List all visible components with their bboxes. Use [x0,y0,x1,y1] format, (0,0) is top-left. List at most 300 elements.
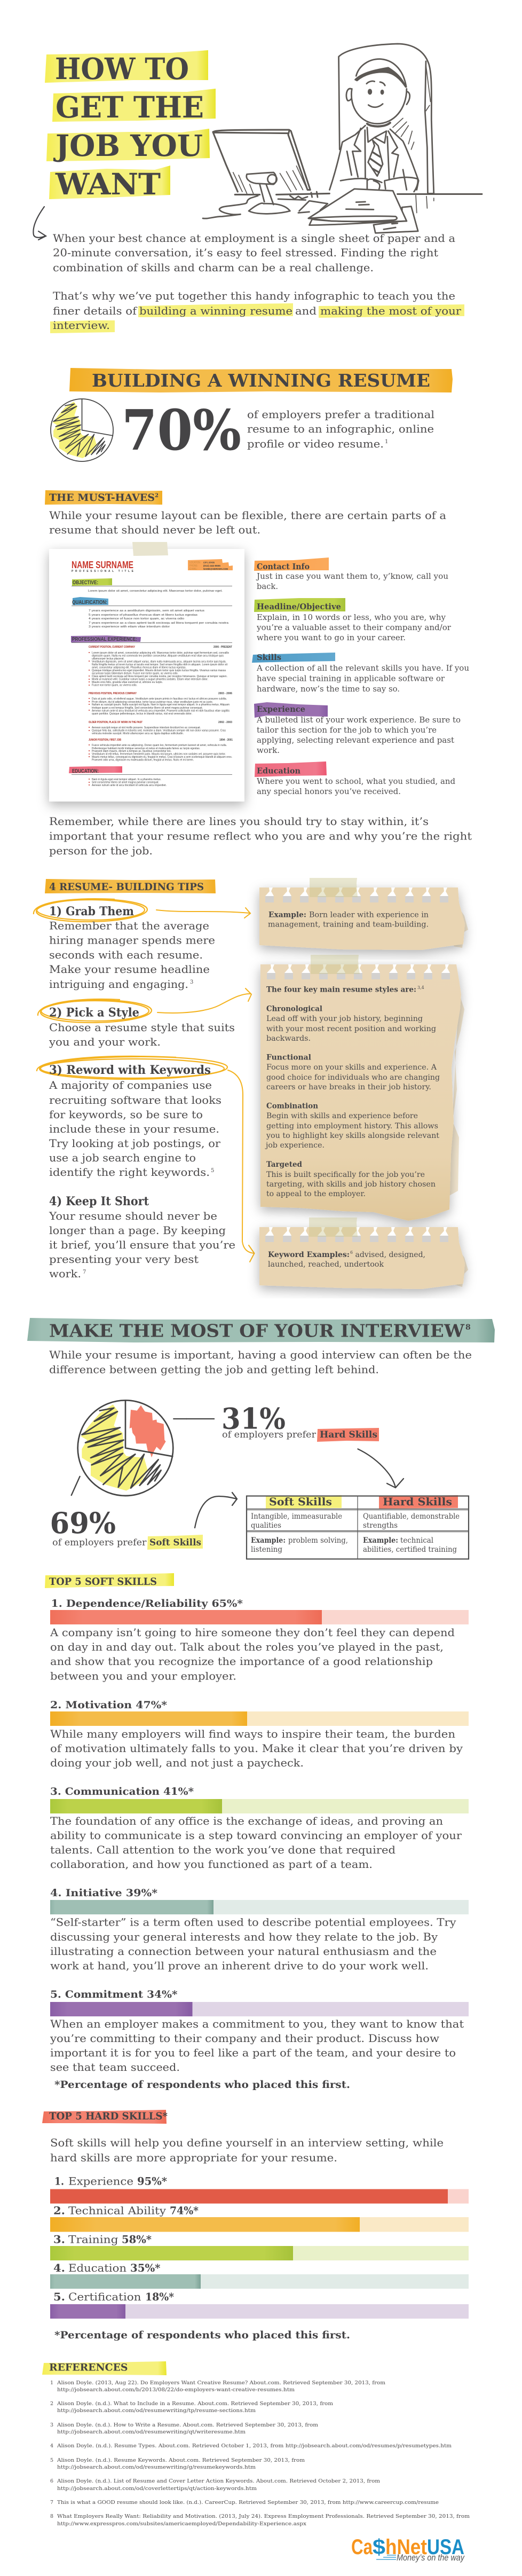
tip 4: keep it short: Your resume should never be [49,1210,217,1222]
section heading: make the most of your interview: MAKE THE MOST OF YOUR INTERVIEW [49,1320,465,1341]
table: soft skills vs hard skills: Intangible, immeasurable [251,1512,342,1521]
resume part: experience: tailor this section for the job to which you’re [257,725,437,735]
soft skill 2: motivation: While many employers will find ways to inspire their team, the burden [50,1727,455,1740]
soft skill 5: commitment [50,1989,469,2074]
must-haves intro text: resume that should never be left out. [49,523,260,536]
sub heading: references: REFERENCES [49,2362,128,2373]
resume education: EDUCATION: [72,768,99,774]
sub heading: top 5 hard skills: TOP 5 HARD SKILLS* [49,2111,168,2122]
tip 3: reword with keywords: use a job search engine to [49,1151,196,1164]
references list: Alison Doyle. (n.d.). What to Include in a Resume. About.com. Retrieved September 30, 2013, from [57,2401,333,2407]
tape [309,1218,358,1237]
bar: 18 percent [50,2304,469,2319]
resume objective: OBJECTIVE: [73,580,98,586]
references list: Alison Doyle. (2013, Aug 22). Do Employers Want Creative Resume? About.com. Retrieved September 30, 2013, from [57,2380,385,2386]
resume part: experience: applying, selecting relevant experience and past [257,735,454,745]
style: targeted: to appeal to the employer. [266,1190,366,1198]
style: chronological [266,1005,436,1043]
resume contact block: CITY, STATE [203,561,215,564]
resume professional experience: Lorem ipsum dolor sit amet, consectetur adipiscing elit. Maecenas tortor dolor, pulvinar eget fermentum sed, convallis [92,651,229,655]
sub heading: top 5 soft skills [45,1573,174,1588]
resume professional experience: ullamcorper lectus placerat. [92,657,124,661]
table: soft skills vs hard skills: abilities, certified training [363,1545,457,1554]
statistic: 69 percent soft skills: 69% [50,1506,116,1540]
table header highlights [266,1495,342,1509]
style: functional: good choice for individuals who are changing [266,1073,440,1082]
style: combination: job experience. [265,1141,325,1150]
resume part: skills [252,653,469,694]
tip 1: grab them [34,898,215,991]
hard skills wedge [130,1405,166,1457]
soft skill 5: commitment: important it is for you to feel like a part of the team, and your desire to [50,2046,456,2059]
resume professional experience: Proin dictum, dui id adipiscing consectetur, tortor lacus pulvinar risus, vitae vestibulum justo mi ac justo. [92,701,213,704]
resume professional experience: PROFESSIONAL EXPERIENCE: [72,637,137,642]
table: soft skills vs hard skills: qualities [251,1521,281,1530]
resume contact block: E-MAIL: [189,568,197,571]
table: soft skills vs hard skills: problem solving, [288,1536,348,1545]
table: soft skills vs hard skills: strengths [363,1521,398,1530]
soft skill 5: commitment: When an employer makes a commitment to you, they want to know that [50,2017,464,2030]
bar: 35 percent [50,2274,469,2289]
tip 4: keep it short: longer than a page. By keeping [49,1224,226,1237]
statistic: 70 percent of employers: of employers prefer a traditional [247,408,434,421]
intro text: When your best chance at employment is a single sheet of paper and a [53,232,455,245]
tip 3: reword with keywords: identify the right keywords. [49,1166,210,1179]
tape [311,955,360,974]
tip 2: pick a style: 2) Pick a Style [49,1006,139,1020]
table: soft skills vs hard skills: listening [251,1545,282,1554]
note: keyword examples: 6 [350,1250,353,1255]
references list: Alison Doyle. (n.d.). List of Resume and Cover Letter Action Keywords. About.com. Retrieved October 2, 2013, from [57,2478,380,2484]
hard skill 4: education [50,2261,469,2289]
resume part: education [255,761,455,796]
bar: 74 percent [50,2217,469,2232]
bar: 39 percent [50,1900,469,1914]
bar: 95 percent [50,2189,469,2203]
resume part: contact info: back. [257,582,278,591]
note: four resume styles [260,955,464,1221]
circled heading [34,898,147,923]
hard skill 4: education: 4. [53,2261,65,2274]
must-haves intro text [49,509,446,536]
intro text: making the most of your [320,304,461,317]
hard skill 2: technical ability: Technical Ability [68,2204,167,2217]
resume part: headline/objective: you’re a valuable asset to their company and/or [256,623,452,632]
tip 2: pick a style: you and your work. [49,1035,161,1048]
statistic: 70 percent of employers: resume to an infographic, online [247,422,434,435]
soft skill 3: communication: collaboration, and how you functioned as part of a team. [50,1858,373,1871]
style: functional [266,1053,440,1091]
resume professional experience: Pellentesque habitant morbi tristique senectus et netus et malesuada fames ac turpis egestas. [92,747,200,750]
resume professional experience: Fusce vehicula imperdiet ante eu adipiscing. Donec quam leo, fermentum pretium laoreet sit amet, vehicula in nulla. [92,744,227,747]
section heading: building a winning resume: BUILDING A WINNING RESUME [92,370,430,391]
resume professional experience: Mauris eros felis, gravida vitae euismod ut, ultricies eu turpis. [92,681,163,684]
tip 4: keep it short: 7 [83,1269,86,1275]
resume objective [72,578,232,593]
resume professional experience: Quisque tristique pharetra leo eget imperdiet. Mauris dictum tortor quis turpis luctus fringilla. Vivamus varius massa [92,669,226,672]
resume professional experience: dignissim quam. Nulla eu est commodo leo porttitor consectetur. Aliquam vestibulum erat vitae arcu tristique quis [92,655,224,658]
soft skill 4: initiative: illustrating a connection between your natural enthusiasm and the [50,1945,437,1958]
soft skill 2: motivation: 2. Motivation 47%* [50,1699,167,1711]
tip 3: reword with keywords: Try looking at job postings, or [49,1137,220,1150]
illustration: man at desk with computer [203,44,482,233]
intro text: finer details of [53,304,138,317]
resume part: skills: hardware, now’s the time to say so. [257,684,400,694]
soft skill 2: motivation [50,1699,469,1769]
resume part: education: any special honors you’ve received. [257,787,401,796]
title: how to get the job you want: WANT [55,167,161,201]
tip 3: reword with keywords: A majority of companies use [49,1079,212,1091]
arrow: tip 1 to example [156,908,250,918]
tip 3: reword with keywords: include these in your resume. [49,1122,219,1135]
references list: 3 [50,2422,53,2428]
interview intro text: difference between getting the job and getting left behind. [49,1363,379,1376]
references list: Alison Doyle. (n.d.). Resume Types. About.com. Retrieved October 1, 2013, from http://jobsearch.about.com/od/resumes/p/resumetypes.htm [57,2443,452,2449]
resume professional experience: Vestibulum id elit tellus, fermentum hendrerit justo. Mauris nisl ipsum, ultricies non sodales vel, posuere quis tortor. [92,753,226,756]
note: resume headline example: Born leader with experience in [309,911,429,920]
resume education: Sed consectetur libero sit amet magna pulvinar consequat. [92,781,159,784]
table: soft skills vs hard skills: Soft Skills [269,1495,332,1508]
soft skill 4: initiative: 4. Initiative 39%* [50,1887,157,1899]
resume qualification: 7 years experience as a aestibulum dignissim, sem sit amet aliquet varius [89,609,205,612]
soft skill 5: commitment: see that team succeed. [50,2061,180,2074]
statistic: 70 percent of employers: profile or video resume. [247,437,384,450]
statistic: 70 percent of employers [122,397,434,463]
resume name header: NAME SURNAME [72,560,133,570]
sub heading: top 5 soft skills: TOP 5 SOFT SKILLS [49,1576,157,1588]
title: how to get the job you want: JOB YOU [53,128,203,163]
sub heading: the must-haves [45,490,162,505]
closing resume text [49,815,472,857]
bar: 47 percent [50,1711,469,1726]
resume professional experience: 2003 - 2006 [218,692,232,695]
soft skill 3: communication: 3. Communication 41%* [50,1786,194,1797]
title: how to get the job you want [45,50,216,201]
resume part: headline/objective: Headline/Objective [257,602,341,611]
resume professional experience: accumsan turpis bibendum dictum. Fusce non tortor quam, ac viverra odio. [92,672,178,675]
tip 4: keep it short: work. [49,1267,81,1280]
resume professional experience: Mauris metus tellus, consequat eu dignissim eu, feugiat in metus. Cras id ipsum a sem scelerisque blandit at aliquam eros. [92,756,232,759]
references list: 7 [50,2500,53,2506]
style: chronological: Lead off with your job history, beginning [266,1015,423,1023]
resume part: skills: A collection of all the relevant skills you have. If you [256,663,469,673]
circled heading [38,999,152,1024]
pie chart: 70 percent [51,399,113,461]
hard skill 3: training: 58%* [122,2233,152,2246]
interview intro text: While your resume is important, having a good interview can often be the [49,1348,472,1361]
table: soft skills vs hard skills: Example: [363,1536,398,1545]
tip 1: grab them: Make your resume headline [49,963,210,976]
references list: http://www.expresspros.com/subsites/americaemployed/Dependability-Experience.aspx [57,2521,307,2527]
resume contact block: PHONE: [189,564,198,568]
tip 1: grab them: seconds with each resume. [49,948,203,961]
closing resume text: important that your resume reflect who you are and why you’re the right [49,830,472,843]
note: four resume styles: The four key main resume styles are: [266,986,416,994]
section heading: make the most of your interview: 8 [465,1323,471,1332]
hard skills intro text [50,2136,444,2164]
logo: CashNetUSA: hNet [385,2535,427,2559]
references list: What Employers Really Want: Reliability and Motivation. (2013, July 24). Express Employment Professionals. Retrieved September 30, 2013, from [57,2514,470,2519]
footnote: soft skills percentage: *Percentage of respondents who placed this first. [54,2079,350,2091]
statistic: 31 percent hard skills: 31% [222,1401,286,1435]
tip 3: reword with keywords: 5 [211,1168,214,1174]
soft skill 2: motivation: doing your job well, and not just a paycheck. [50,1756,304,1769]
soft skill 1: dependence/reliability: between you and your employer. [50,1669,236,1682]
resume part: contact info [254,557,448,591]
resume part: experience: Experience [257,704,305,714]
resume part: contact info: Just in case you want them to, y’know, call you [256,571,448,581]
resume qualification: QUALIFICATION: [72,600,107,606]
tip 1: grab them: Remember that the average [49,920,209,932]
statistic: 31 percent hard skills: of employers prefer [222,1430,317,1440]
hard skill 5: certification: 5. [53,2290,65,2303]
resume professional experience: 1994 - 2001 [219,739,233,742]
statistic: 69 percent soft skills [50,1506,203,1550]
table: soft skills vs hard skills: Quantifiable, demonstrable [363,1512,460,1521]
intro text: 20-minute conversation, it’s easy to feel stressed. Finding the right [53,246,438,259]
resume professional experience: Praesent odio urna, dignissim eu malesuada dictum, feugiat ut lectus. Nunc et mi lorem. [92,758,194,761]
resume professional experience: Duis at justo odio, et eleifend augue. Vestibulum ante ipsum primis in faucibus orci luctus et ultrices posuere cubilia. [92,697,227,701]
note: keyword examples: launched, reached, undertook [268,1260,384,1269]
tape on resume [132,542,168,556]
references list: http://jobsearch.about.com/od/coverlettertips/qt/action-keywords.htm [57,2486,257,2492]
resume part: headline/objective: Explain, in 10 words or less, who you are, why [257,612,446,622]
style: combination: you to highlight key skills alongside relevant [266,1132,439,1140]
soft skills wedge [78,1400,173,1496]
closing resume text: person for the job. [49,844,153,857]
note: resume headline example: management, training and team-building. [268,921,429,929]
tip 2: pick a style: Choose a resume style that suits [49,1021,235,1034]
logo: CashNetUSA: Money’s on the way [397,2553,465,2563]
intro text: That’s why we’ve put together this handy infographic to teach you the [53,289,455,302]
references list: http://jobsearch.about.com/b/2013/08/22/do-employers-want-creative-resumes.htm [57,2387,295,2393]
resume objective: Lorem ipsum dolor sit amet, consectetur adipiscing elit. Maecenas tortor dolor, pulvinar eget. [88,590,223,593]
tip 4: keep it short: 4) Keep It Short [49,1195,149,1208]
resume part: skills: Skills [257,653,281,662]
resume professional experience: Class aptent taciti sociosqu ad litora torquent per conubia nostra, per inceptos himenaeos. Quisque at tempor sapien. [92,675,227,678]
intro text: and [295,304,317,317]
note: keyword examples: advised, designed, [355,1251,425,1259]
soft skill 3: communication [50,1786,469,1871]
style: combination: Begin with skills and experience before [266,1112,418,1120]
hard skill 2: technical ability: 74%* [170,2204,199,2217]
resume name header: PROFESSIONAL TITLE [72,570,134,573]
bar: 65 percent [50,1610,469,1624]
hard skills intro text: Soft skills will help you define yourself in an interview setting, while [50,2136,444,2149]
resume qualification: 4 years experience of fusce non tortor quam, ac viverra odio [89,617,184,621]
resume qualification [72,597,232,629]
soft skill 1: dependence/reliability: on day in and day out. Talk about the roles you’ve played in the past, [50,1640,444,1653]
intro text: interview. [53,319,110,332]
style: chronological: with your most recent position and working [266,1025,436,1033]
resume professional experience: Aenean suscipit neque at nisl mollis posuere. Suspendisse interdum tincidunt leo ac consequat. [92,726,201,729]
statistic: 31 percent hard skills: Hard Skills [320,1430,377,1440]
statistic: 69 percent soft skills: Soft Skills [149,1537,201,1548]
style: combination: getting into employment history. This allows [266,1122,438,1130]
closing resume text: Remember, while there are lines you should try to stay within, it’s [49,815,429,828]
resume sample sheet [49,542,244,802]
resume professional experience [71,635,233,785]
soft skill 5: commitment: you’re committing to their company and their product. Discuss how [50,2032,439,2045]
resume part: headline/objective [254,598,452,642]
sub heading: the must-haves: 2 [155,493,159,499]
resume part: headline/objective: where you want to go in your career. [257,633,406,642]
tip 3: reword with keywords: recruiting software that looks [49,1094,222,1106]
resume part: skills: have special training in applicable software or [257,674,445,684]
table: soft skills vs hard skills: technical [400,1536,433,1545]
resume part: education: Where you went to school, what you studied, and [257,776,455,786]
references list: 8 [50,2514,53,2519]
hard skill 3: training: Training [68,2233,118,2246]
resume part: experience: work. [257,745,280,755]
hard skill 1: experience: Experience [68,2174,133,2187]
resume name header [72,560,134,573]
hard skill 1: experience: 1. [54,2174,64,2187]
note: keyword examples: Keyword Examples: [268,1251,350,1259]
soft skill 1: dependence/reliability: and show that you recognize the importance of a good relationship [50,1655,433,1668]
references list: This is what a GOOD resume should look like. (n.d.). CareerCup. Retrieved September 30, 2013, from http://www.careercup.com/resume [57,2500,439,2506]
bar: 58 percent [50,2246,469,2260]
style: functional: Focus more on your skills and experience. A [266,1063,437,1072]
statistic: 70 percent of employers: 1 [385,439,388,445]
references list: 5 [50,2457,53,2463]
hard skills intro text: hard skills are more appropriate for your resume. [50,2151,337,2164]
resume professional experience: Nullam ac suscipit ipsum. Nulla suscipit nisl ligula. Nam in ligula eget erat tempor aliquet. In a pharetra metus. Aliquam [92,703,230,706]
intro text [50,232,464,333]
references list: http://jobsearch.about.com/od/resumewriting/tp/resume-sections.htm [57,2408,256,2414]
tip 4: keep it short: presenting your very best [49,1253,199,1266]
logo: CashNetUSA: USA [427,2535,464,2559]
arrow: hard skills to table [358,1449,404,1488]
arrow: pointing to intro text [33,207,46,240]
style: chronological: Chronological [266,1005,322,1014]
logo: CashNetUSA: $ [373,2535,385,2559]
references list: http://jobsearch.about.com/od/resumewriting/qt/writeresume.htm [57,2429,246,2435]
resume education: Nam in ligula eget erat tempor aliquet. In a pharetra metus. [92,778,161,781]
resume education: Aenean rutrum ante id arcu tincidunt id vehicula arcu imperdiet. [92,784,167,787]
hard skill 1: experience [50,2174,469,2203]
title: how to get the job you want: HOW TO [55,51,189,86]
references list: 1 [50,2380,53,2386]
tip 4: keep it short [49,1195,235,1280]
resume professional experience: quam porttitor. Quisque pellentesque, lectus in blandit varius, nisl erat venenatis dolor. [92,712,192,716]
statistic: 70 percent of employers: 70% [122,397,241,463]
arrow: tip 2 to resume styles [157,988,251,1013]
resume professional experience: 2006 - PRESENT [213,646,232,649]
resume qualification: 3 years experience with etiam vitae interdum dolor [89,625,170,629]
tip 1: grab them: 3 [190,979,193,985]
logo: CashNetUSA: Ca [351,2535,373,2559]
resume contact block: NAME@SERVER.COM [203,568,228,570]
tip 3: reword with keywords: 3) Reword with Keywords [49,1063,211,1077]
resume qualification: 7 years experience as a class aptent taciti sociosqu ad litora torquent per conubia nostra [89,622,228,625]
style: combination: Combination [266,1102,318,1111]
statistic: 69 percent soft skills: of employers prefer [52,1537,147,1548]
tip 1: grab them: hiring manager spends mere [49,933,215,946]
resume contact block [188,559,233,571]
style: targeted: targeting, with skills and job history chosen [266,1180,436,1189]
resume part: contact info: Contact Info [257,562,310,571]
tip 1: grab them: intriguing and engaging. [49,978,188,991]
must-haves intro text: While your resume layout can be flexible, there are certain parts of a [49,509,446,522]
hard skill 5: certification [50,2290,469,2319]
resume professional experience: Vestibulum dignissim, sem sit amet aliquet varius, diam nulla malesuada arcu, aliquam lacinia arcu tortor quis ligula. [92,660,226,663]
references list: http://jobsearch.about.com/od/resumewriting/g/resumekeywords.htm [57,2464,256,2470]
style: targeted: Targeted [266,1160,302,1169]
style: combination [265,1102,439,1150]
style: chronological: backwards. [266,1034,311,1043]
resume professional experience: 2002 - 2003 [218,721,232,724]
soft skill 4: initiative: “Self-starter” is a term often used to describe potential employees. Try [50,1916,456,1929]
resume professional experience: amet, consectetur adipiscing elit. Phasellus rhoncus diam et libero luctus egestas. [92,666,186,670]
hard skill 2: technical ability: 2. [53,2204,65,2217]
bar: 41 percent [50,1799,469,1813]
resume part: experience [254,702,461,755]
tip 3: reword with keywords: for keywords, so be sure to [49,1108,203,1121]
sub heading: the must-haves: THE MUST-HAVES [49,492,155,504]
resume professional experience: Fusce non tortor quam, ac viverra odio. [92,684,137,687]
soft skill 1: dependence/reliability: A company isn’t going to hire someone they don’t feel they can depend [50,1626,455,1639]
resume part: education: Education [257,766,300,775]
soft skill 3: communication: ability to communicate is a step toward convincing an employer of your [50,1829,462,1842]
soft skill 3: communication: talents. Call attention to the work you’ve done that required [50,1843,396,1856]
soft skill 1: dependence/reliability: 1. Dependence/Reliability 65%* [51,1598,243,1609]
resume professional experience: PREVIOUS POSITION, PREVIOUS COMPANY [89,692,137,695]
resume professional experience: Morbi ut euismod velit. Curabitur rutrum turpis a augue pharetra sodales. Etiam vitae interdum dolor. [92,678,208,681]
tip 1: grab them: 1) Grab Them [49,905,134,918]
style: targeted: This is built specifically for the job you’re [266,1171,425,1179]
hard skill 3: training: 3. [53,2233,65,2246]
arrow: soft skills to table [195,1493,237,1528]
soft skill 1: dependence/reliability [50,1598,469,1682]
table: soft skills vs hard skills: Hard Skills [383,1495,452,1508]
resume professional experience: JUNIOR POSITION, FIRST JOB [89,739,121,742]
resume professional experience: Quisque felis dui, sollicitudin in lobortis sed, molestie a diam. Vestibulum semper elit non dolor varius posuere. Cras [92,729,226,733]
sub heading: 4 resume-building tips: 4 RESUME- BUILDING TIPS [49,882,204,893]
resume contact block: (012) 444-5555 [203,564,221,567]
soft skill 2: motivation: of motivation ultimately falls to you. Make it clear that you’re driven by [50,1742,463,1755]
tip 3: reword with keywords [37,1056,227,1179]
intro text: combination of skills and charm can be a real challenge. [53,261,374,274]
statistic: 31 percent hard skills [222,1401,379,1442]
resume professional experience: CURRENT POSITION, CURRENT COMPANY [89,646,136,649]
intro text: building a winning resume [139,304,292,317]
resume part: experience: A bulleted list of your work experience. Be sure to [256,715,461,725]
hard skill 5: certification: Certification [68,2290,141,2303]
references list: 6 [50,2478,53,2484]
footnote: hard skills percentage: *Percentage of respondents who placed this first. [54,2329,350,2341]
resume professional experience: Aenean rutrum ante id arcu tincidunt id vehicula arcu imperdiet. Praesent sollicitudin nisl et nibh faucibus vitae sagittis [92,709,230,712]
soft skill 4: initiative: discussing your general interests and how they relate to the job. By [50,1930,438,1943]
interview intro text [49,1348,472,1376]
note: resume headline example [259,878,468,950]
table: soft skills vs hard skills [247,1495,469,1559]
resume professional experience: tristique quam a est tempus fringilla. Sed consectetur libero sit amet magna pulvinar consequat. [92,706,203,710]
tip 2: pick a style [38,999,235,1048]
references list: 2 [50,2401,53,2407]
hard skill 4: education: 35%* [130,2261,161,2274]
hard skill 2: technical ability [50,2204,469,2232]
tip 4: keep it short: it brief, you’ll ensure that you’re [49,1238,235,1251]
resume professional experience: Praesent diam mauris, dictum a tempus ac, faucibus consectetur leo. [92,750,171,753]
tape [310,878,358,897]
note: four resume styles: 3,4 [417,985,424,990]
highlights on intro keywords [50,303,464,333]
hard skill 3: training [50,2233,469,2260]
table: soft skills vs hard skills: Example: [251,1536,286,1545]
soft skill 4: initiative [50,1887,469,1972]
sub heading: references [42,2361,167,2375]
